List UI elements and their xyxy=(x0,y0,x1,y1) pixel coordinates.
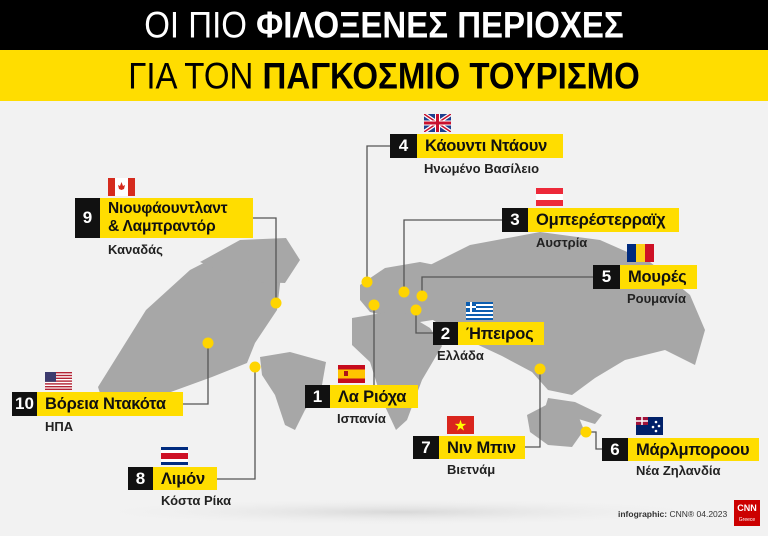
label 3: 3 xyxy=(510,210,520,229)
label 9: 9 xyxy=(83,208,92,227)
label 2: Ήπειρος xyxy=(466,324,533,342)
label 6 xyxy=(602,417,759,478)
label 2: 2 xyxy=(441,324,450,342)
label 3: Ομπερέστερραϊχ xyxy=(536,211,665,229)
label 10: Βόρεια Ντακότα xyxy=(45,395,166,413)
label 9: & Λαμπραντόρ xyxy=(108,218,215,235)
subtitle bar: ΓΙΑ ΤΟΝ ΠΑΓΚΟΣΜΙΟ ΤΟΥΡΙΣΜΟ xyxy=(128,54,640,96)
flag Austria xyxy=(536,188,563,206)
label 9 xyxy=(75,178,253,257)
label 1 xyxy=(305,365,418,426)
logo CNN Greece: CNN xyxy=(737,503,757,513)
flag USA xyxy=(45,372,72,390)
label 2: Ελλάδα xyxy=(437,348,484,363)
label 5: Μουρές xyxy=(628,268,686,286)
flag Spain xyxy=(338,365,365,383)
label 4: 4 xyxy=(399,136,408,155)
label 10: 10 xyxy=(15,394,34,413)
label 8: Λιμόν xyxy=(161,470,205,488)
label 7 xyxy=(413,416,525,477)
label 4 xyxy=(390,114,563,176)
flag Costa Rica xyxy=(161,447,188,465)
label 5 xyxy=(593,244,697,306)
label 1: 1 xyxy=(313,386,322,406)
label 1: Λα Ριόχα xyxy=(338,388,406,406)
label 9: Καναδάς xyxy=(108,242,163,257)
label 7: Νιν Μπιν xyxy=(447,438,516,456)
label 2 xyxy=(433,302,544,363)
label 5: 5 xyxy=(602,267,611,286)
logo CNN Greece: Greece xyxy=(739,517,755,523)
label 1: Ισπανία xyxy=(337,411,386,426)
label 8: Κόστα Ρίκα xyxy=(161,493,231,508)
label 8 xyxy=(128,447,231,508)
subtitle bar xyxy=(0,50,768,101)
flag UK xyxy=(424,114,451,132)
label 3 xyxy=(502,188,679,250)
flag Greece xyxy=(466,302,493,320)
credit: infographic: CNN® 04.2023 xyxy=(618,509,727,519)
label 7: Βιετνάμ xyxy=(447,462,495,477)
flag New Zealand xyxy=(636,417,663,435)
flag Vietnam xyxy=(447,416,474,434)
label 4: Κάουντι Ντάουν xyxy=(425,137,547,155)
flag Romania xyxy=(627,244,654,262)
label 8: 8 xyxy=(136,468,145,488)
flag Vietnam: ★ xyxy=(454,418,467,432)
label 5: Ρουμανία xyxy=(627,291,686,306)
label 6: 6 xyxy=(610,440,620,458)
label 6: Μάρλμποροου xyxy=(636,440,749,458)
label 9: Νιουφάουντλαντ xyxy=(108,200,227,217)
label 4: Ηνωμένο Βασίλειο xyxy=(424,161,539,176)
title bar: ΟΙ ΠΙΟ ΦΙΛΟΞΕΝΕΣ ΠΕΡΙΟΧΕΣ xyxy=(144,4,624,45)
label 10 xyxy=(12,372,183,434)
label 10: ΗΠΑ xyxy=(45,419,73,434)
label 7: 7 xyxy=(421,438,431,456)
label 6: Νέα Ζηλανδία xyxy=(636,463,721,478)
label 3: Αυστρία xyxy=(536,235,587,250)
title bar xyxy=(0,0,768,50)
logo CNN Greece xyxy=(734,500,760,526)
flag Canada xyxy=(108,178,135,196)
